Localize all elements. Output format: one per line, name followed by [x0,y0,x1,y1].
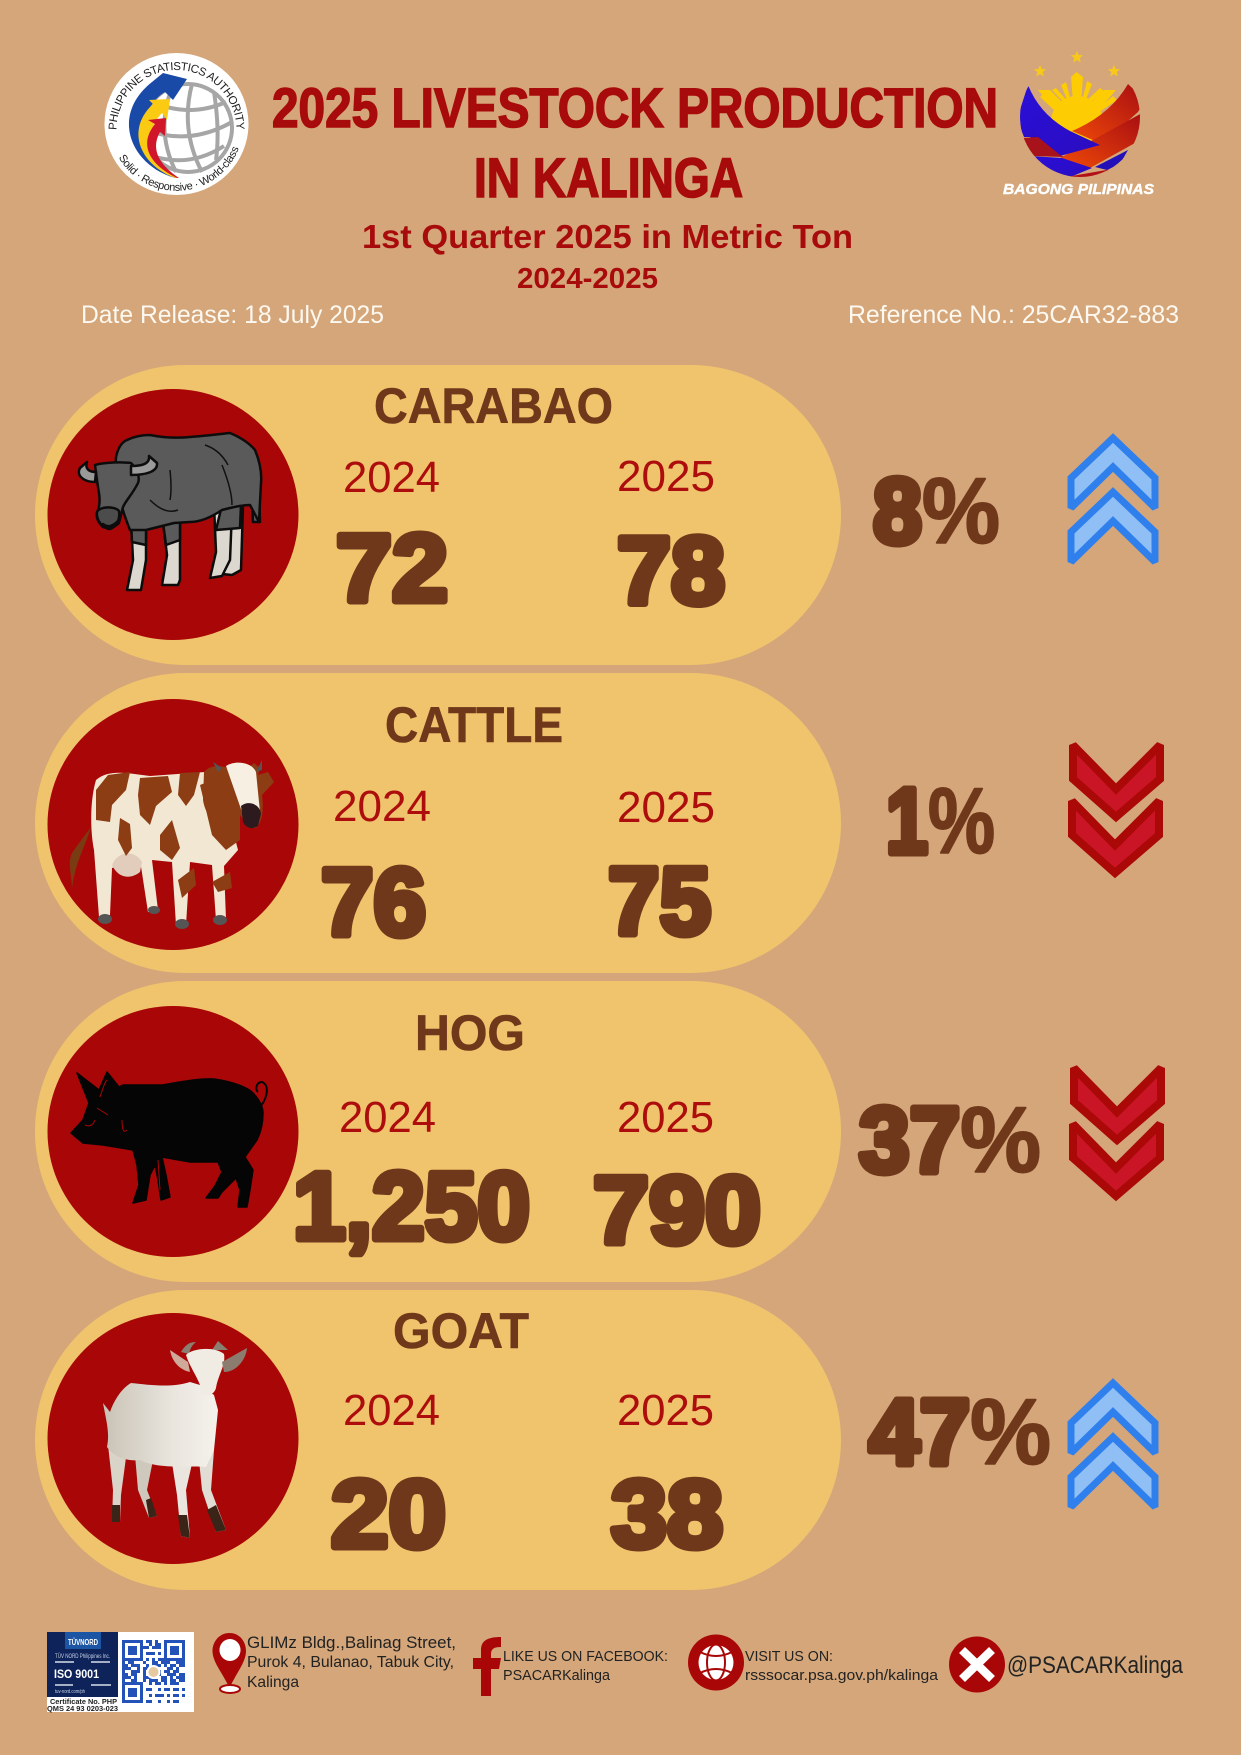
arrow: cattle down [1072,745,1160,873]
icon: globe [688,1634,744,1690]
year range: 2024-2025 [517,263,658,295]
2024 value: 76 [321,849,426,956]
X handle: @PSACARKalinga [1007,1652,1184,1679]
reference number: Reference No.: 25CAR32-883 [848,301,1179,329]
2025 label: 2025 [617,783,715,832]
icon: cow [70,760,274,929]
badge: ISO certificate and QR code: TÜV NORD Philippines Inc. [55,1653,110,1660]
address: Kalinga [247,1674,299,1691]
logo motto: Solid · Responsive · World-class [120,146,238,191]
website text [745,1648,939,1684]
address [247,1633,456,1691]
2025 value: 38 [611,1461,723,1568]
facebook text: LIKE US ON FACEBOOK: [503,1648,668,1665]
logo: Bagong Pilipinas [1003,51,1154,198]
title [272,76,998,209]
2024 label: 2024 [333,782,431,831]
change: carabao: 8% [873,459,1000,563]
label: CARABAO [374,378,613,434]
address: GLIMz Bldg.,Balinag Street, [247,1633,456,1652]
arrow: carabao up [1071,438,1155,562]
facebook text [503,1648,668,1684]
label: CATTLE [385,697,563,753]
address: Purok 4, Bulanao, Tabuk City, [247,1654,454,1671]
facebook text: PSACARKalinga [503,1667,611,1684]
2025 value: 78 [617,518,725,624]
badge: ISO certificate and QR code: ISO 9001 [54,1669,100,1681]
date release: Date Release: 18 July 2025 [81,301,384,329]
icon: location pin [212,1633,246,1693]
logo ring text: PHILIPPINE STATISTICS AUTHORITY [108,62,244,130]
2024 value: 1,250 [293,1153,530,1260]
2024 value: 20 [331,1461,446,1568]
2024 label: 2024 [343,453,440,502]
label: GOAT [393,1303,529,1359]
badge: ISO certificate and QR code: Certificate No. PHP [50,1699,117,1706]
icon: hog [71,1072,267,1207]
icon: facebook [473,1637,501,1696]
title: IN KALINGA [474,146,743,209]
panel: cattle [35,673,841,973]
arrow: goat up [1071,1383,1155,1507]
change: hog: 37% [859,1088,1041,1192]
badge: ISO certificate and QR code: tuv-nord.com/ph [55,1689,85,1695]
2024 label: 2024 [343,1386,440,1435]
badge: ISO certificate and QR code [47,1632,194,1713]
panel: goat [35,1290,841,1590]
logo: Philippine Statistics Authority [104,53,248,195]
badge: ISO certificate and QR code: TÜVNORD [68,1638,98,1647]
2025 label: 2025 [617,1386,714,1435]
logo wordmark: BAGONG PILIPINAS [1003,182,1154,198]
2025 label: 2025 [617,452,715,501]
badge: ISO certificate and QR code: QMS 24 93 0203-023 [47,1706,118,1713]
icon: goat [103,1341,247,1538]
2024 label: 2024 [339,1093,436,1142]
change: cattle: 1% [886,769,995,873]
2024 value: 72 [336,515,448,622]
panel: hog [35,981,841,1282]
subtitle: 1st Quarter 2025 in Metric Ton [362,218,853,255]
icon: X [949,1636,1005,1692]
2025 label: 2025 [617,1093,714,1142]
icon: carabao [79,433,261,590]
arrow: hog down [1073,1068,1161,1196]
panel: carabao [35,365,841,665]
change: goat: 47% [869,1380,1051,1484]
title: 2025 LIVESTOCK PRODUCTION [272,76,998,139]
2025 value: 75 [608,848,711,955]
website text: rsssocar.psa.gov.ph/kalinga [745,1667,939,1684]
2025 value: 790 [593,1157,761,1264]
website text: VISIT US ON: [745,1648,833,1665]
label: HOG [415,1005,525,1061]
